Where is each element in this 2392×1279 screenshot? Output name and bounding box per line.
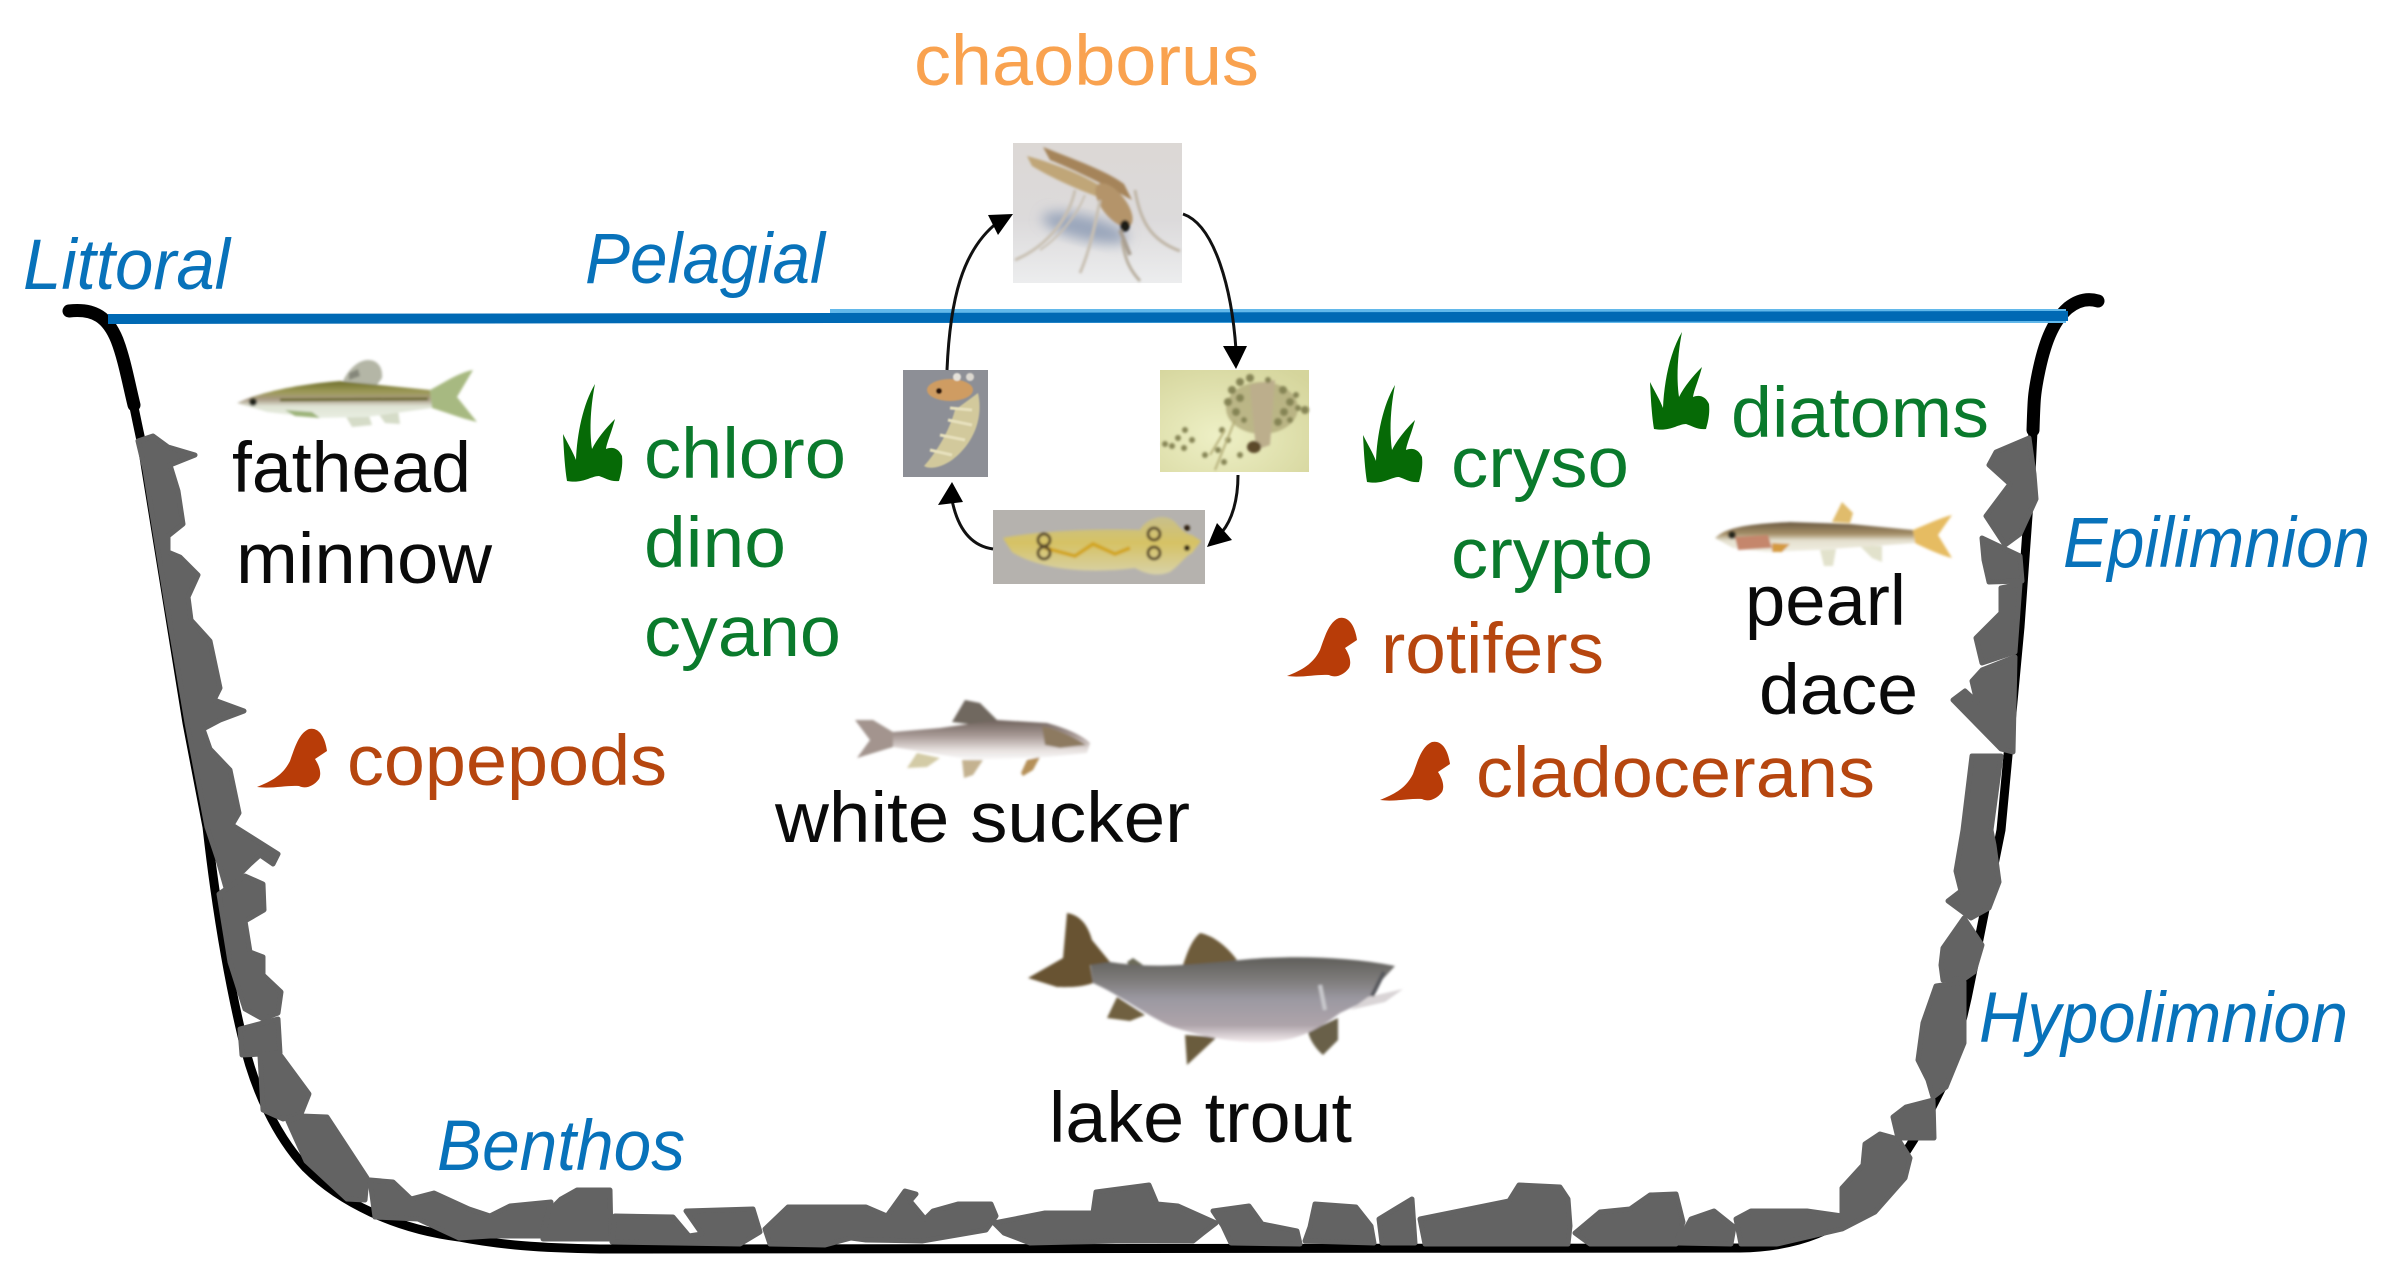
- label: cladocerans: cladocerans: [1476, 734, 1875, 813]
- label: copepods: copepods: [347, 722, 667, 801]
- arrow: pupa to adult: [947, 214, 1013, 370]
- icon: green algae, chloro group: [563, 384, 622, 482]
- photo: chaoborus pupa: [903, 370, 988, 477]
- zone label: Littoral: Littoral: [23, 226, 232, 305]
- icon: zooplankton, cladocerans: [1380, 742, 1450, 801]
- fish: fathead minnow: [237, 360, 477, 427]
- icon: zooplankton, rotifers: [1287, 618, 1357, 677]
- littoral and benthic rocks, left wall: [138, 436, 367, 1200]
- icon: zooplankton, copepods: [257, 729, 327, 788]
- label: chloro dino cyano: dino: [644, 504, 786, 583]
- label: diatoms: diatoms: [1731, 374, 1989, 453]
- label: fathead minnow: minnow: [236, 520, 493, 599]
- heading: chaoborus: chaoborus: [914, 22, 1259, 101]
- fish: pearl dace: [1715, 502, 1952, 566]
- benthic rocks, lake floor: [370, 1180, 1734, 1245]
- rocks, right wall: [1736, 438, 2036, 1244]
- arrow: larva to pupa: [938, 482, 993, 549]
- label: pearl dace: dace: [1759, 651, 1918, 730]
- zone label: Epilimnion: Epilimnion: [2063, 504, 2370, 583]
- photo: chaoborus eggs: [1160, 370, 1309, 472]
- icon: green algae, cryso group: [1363, 385, 1422, 483]
- label: chloro dino cyano: chloro: [644, 415, 846, 494]
- fish: lake trout: [1028, 913, 1403, 1065]
- label: chloro dino cyano: cyano: [644, 593, 841, 672]
- arrow: adult to eggs: [1183, 214, 1247, 369]
- icon: green algae, diatoms: [1650, 332, 1709, 430]
- photo: chaoborus larva: [993, 510, 1205, 584]
- label: cryso crypto: [1451, 424, 1653, 594]
- zone label: Pelagial: Pelagial: [585, 220, 827, 299]
- label: pearl dace: pearl: [1745, 562, 1906, 641]
- zone label: Hypolimnion: Hypolimnion: [1979, 979, 2348, 1058]
- label: lake trout: lake trout: [1049, 1079, 1352, 1158]
- label: cryso crypto: crypto: [1451, 515, 1653, 594]
- label: rotifers: rotifers: [1381, 610, 1604, 689]
- fish: white sucker: [855, 700, 1090, 778]
- label: pearl dace: [1745, 562, 1918, 730]
- label: fathead minnow: [232, 429, 493, 599]
- arrow: eggs to larva: [1207, 475, 1238, 547]
- label: fathead minnow: fathead: [232, 429, 471, 508]
- water surface line: [108, 316, 2068, 319]
- photo: adult chaoborus: [1013, 143, 1182, 283]
- zone label: Benthos: Benthos: [437, 1107, 685, 1186]
- label: white sucker: white sucker: [774, 779, 1190, 858]
- label: cryso crypto: cryso: [1451, 424, 1629, 503]
- lake basin wall: [69, 300, 2098, 1249]
- label: chloro dino cyano: [644, 415, 846, 672]
